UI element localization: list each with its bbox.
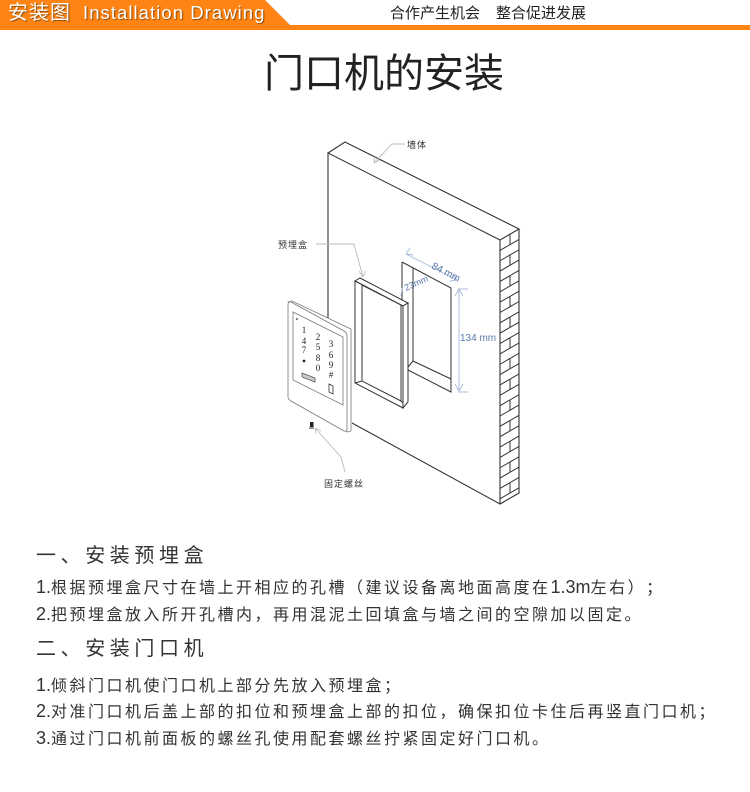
wall opening [402, 262, 451, 392]
brick courses [500, 239, 519, 499]
banner title: 安装图 Installation Drawing [8, 2, 265, 24]
callout leaders [315, 144, 405, 472]
dimension marks [401, 248, 468, 392]
section two text: 3.通过门口机前面板的螺丝孔使用配套螺丝拧紧固定好门口机。 [36, 728, 551, 748]
keypad digits: 3 [329, 339, 334, 349]
section heading one: 一、安装预埋盒 [36, 545, 208, 567]
section one text: 1.根据预埋盒尺寸在墙上开相应的孔槽（建议设备离地面高度在1.3m左右）； [36, 577, 665, 597]
keypad digits: 6 [329, 350, 334, 360]
keypad digits: 0 [316, 363, 321, 373]
keypad digits: 2 [316, 332, 320, 342]
keypad digits: 8 [316, 353, 321, 363]
dimension labels: 23mm [403, 274, 430, 293]
callout labels: 墙体 [407, 139, 427, 150]
keypad digits: 4 [302, 336, 307, 346]
door unit [288, 301, 351, 432]
section two text: 2.对准门口机后盖上部的扣位和预埋盒上部的扣位，确保扣位卡住后再竖直门口机； [36, 701, 717, 721]
keypad digits: 1 [302, 325, 306, 335]
title: 门口机的安装 [264, 52, 504, 96]
keypad digits: 7 [302, 345, 307, 355]
card reader icons [302, 373, 315, 382]
section two text: 1.倾斜门口机使门口机上部分先放入预埋盒； [36, 675, 403, 695]
keypad digits: 9 [329, 360, 334, 370]
callout labels: 预埋盒 [278, 239, 308, 250]
fixing screw [309, 422, 314, 429]
embedded box [355, 278, 408, 408]
header banner [0, 0, 750, 30]
wall [328, 142, 519, 504]
callout labels [278, 139, 427, 489]
section heading two: 二、安装门口机 [36, 638, 208, 660]
keypad digits [302, 325, 334, 380]
header slogan: 合作产生机会 整合促进发展 [390, 5, 586, 22]
section one text [36, 577, 665, 624]
keypad digits: # [329, 370, 334, 380]
section one text: 2.把预埋盒放入所开孔槽内，再用混泥土回填盒与墙之间的空隙加以固定。 [36, 604, 643, 624]
section two text [36, 675, 717, 748]
callout labels: 固定螺丝 [324, 478, 364, 489]
dimension labels: 84 mm [430, 261, 462, 285]
dimension labels [403, 261, 496, 344]
dimension labels: 134 mm [460, 333, 496, 344]
keypad digits: 5 [316, 342, 321, 352]
